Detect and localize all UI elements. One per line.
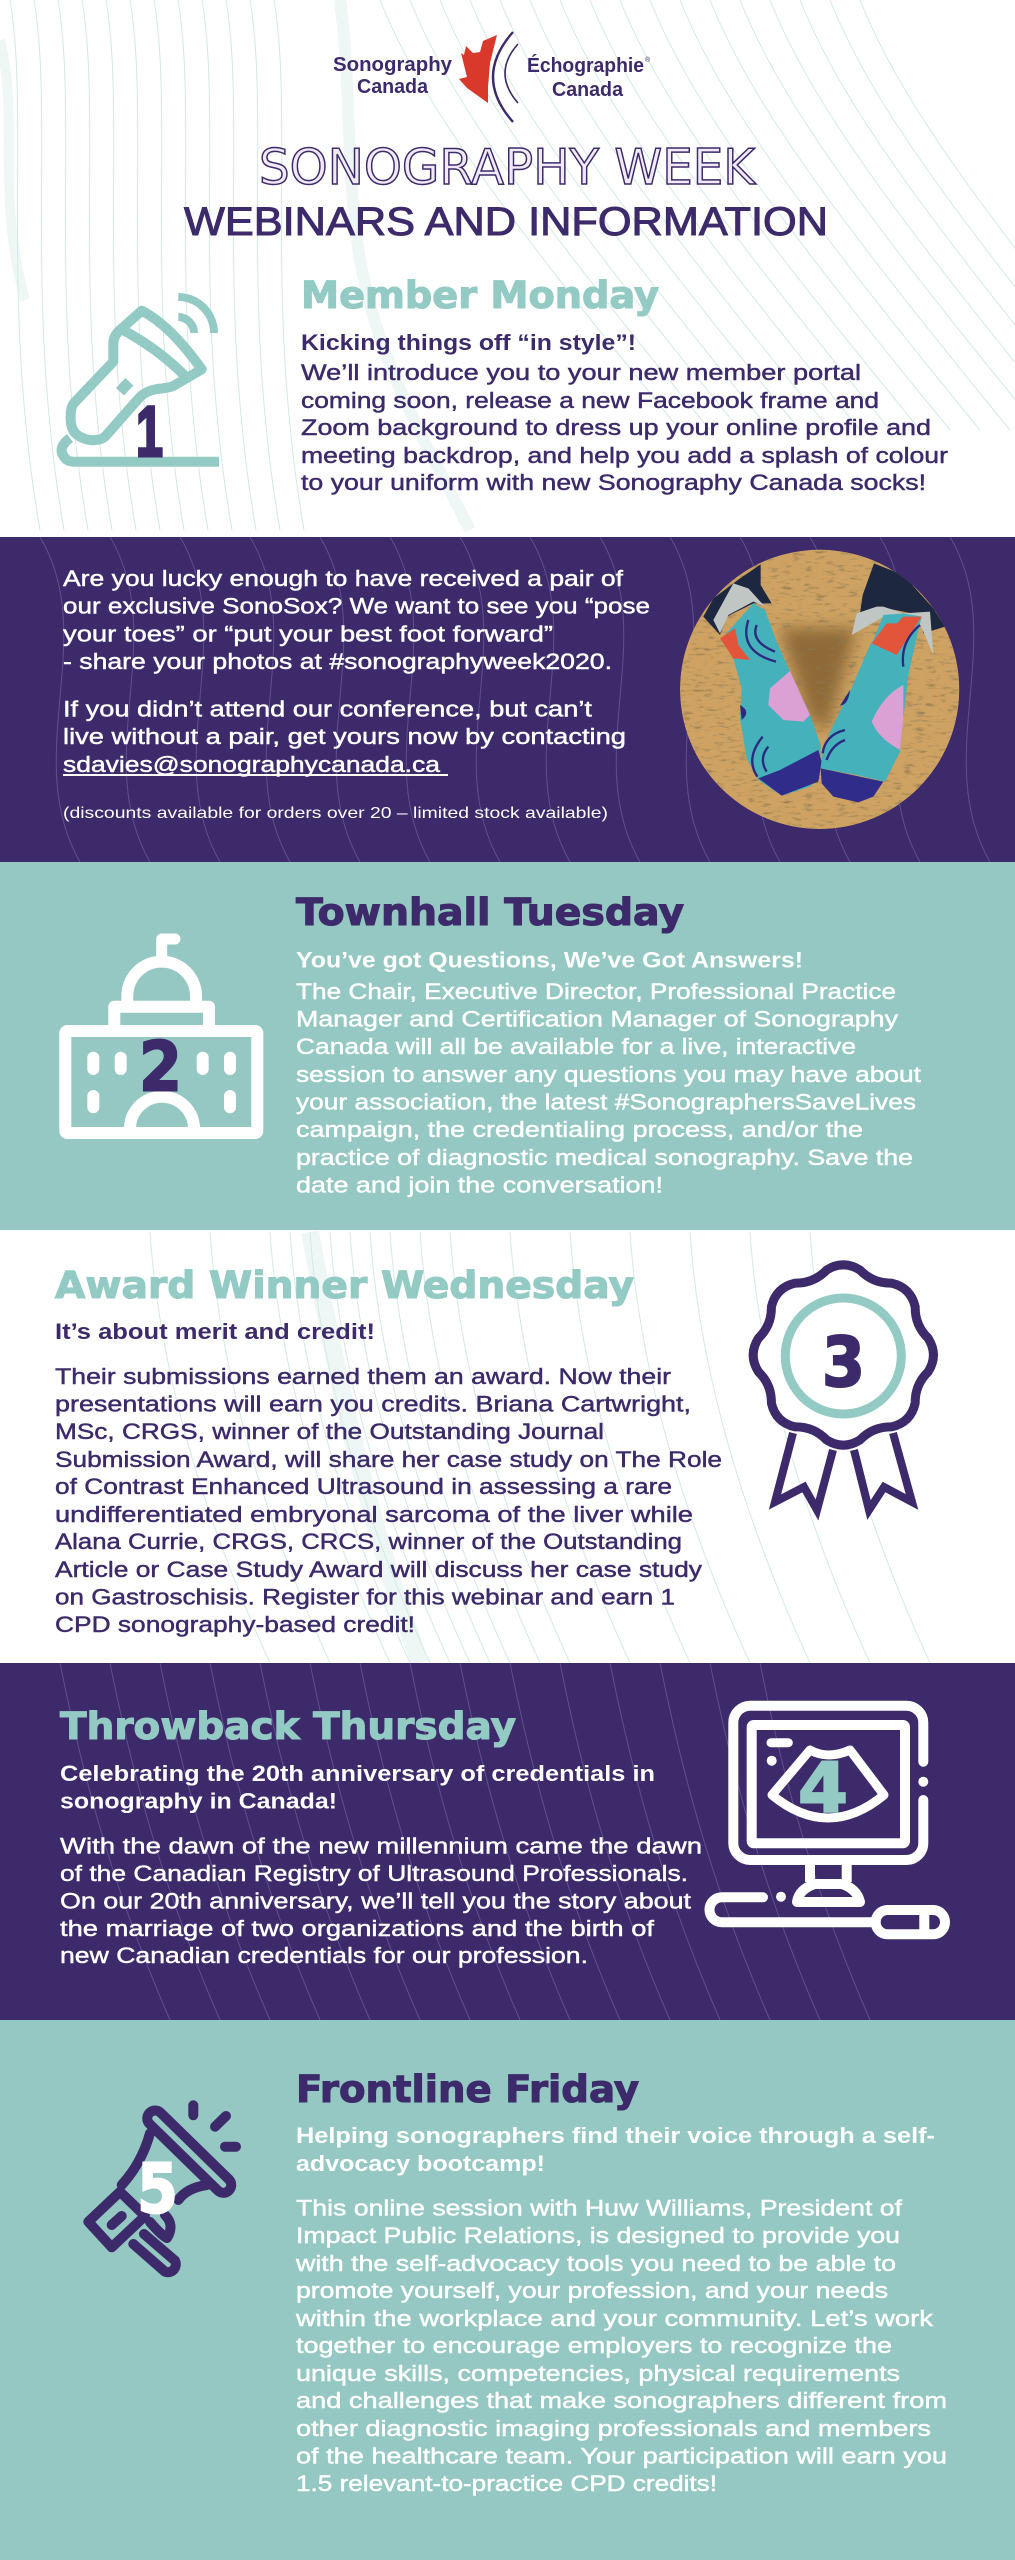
- subheading: Kicking things off “in style”!: [301, 330, 636, 355]
- icon: award rosette with number 3: [753, 1265, 933, 1510]
- body text: promote yourself, your profession, and your needs: [296, 2278, 888, 2303]
- body text: of Contrast Enhanced Ultrasound in assessing a rare: [55, 1474, 672, 1499]
- logo: Sonography Canada: Sonography: [333, 54, 453, 76]
- body text: presentations will earn you credits. Briana Cartwright,: [55, 1392, 691, 1416]
- icon: megaphone with number 5: [88, 2105, 236, 2272]
- body text: on Gastroschisis. Register for this webinar and earn 1: [55, 1584, 675, 1610]
- body text: and challenges that make sonographers different from: [296, 2388, 947, 2413]
- subheading: [60, 1761, 655, 1814]
- body text: We’ll introduce you to your new member portal: [301, 360, 861, 385]
- body text: the marriage of two organizations and the birth of: [60, 1916, 655, 1941]
- body text: Their submissions earned them an award. Now their: [55, 1364, 672, 1389]
- body text: unique skills, competencies, physical requirements: [296, 2361, 900, 2386]
- body text: Zoom background to dress up your online profile and: [301, 415, 931, 440]
- body text: new Canadian credentials for our profession.: [60, 1943, 588, 1968]
- panel: Member Monday: [62, 274, 949, 495]
- body text: socks: Are you lucky enough to have received a pair of: [63, 566, 624, 591]
- logo: Sonography Canada: Échographie: [527, 54, 644, 77]
- body text: undifferentiated embryonal sarcoma of the liver while: [55, 1502, 693, 1527]
- body text: socks: - share your photos at #sonographyweek2020.: [63, 649, 612, 674]
- body text: The Chair, Executive Director, Professional Practice: [296, 979, 896, 1004]
- body text: With the dawn of the new millennium came the dawn: [60, 1834, 702, 1858]
- body text: session to answer any questions you may have about: [296, 1062, 922, 1087]
- subheading: advocacy bootcamp!: [296, 2151, 545, 2176]
- subheading: Celebrating the 20th anniversary of credentials in: [60, 1761, 655, 1786]
- icon: megaphone with number 5: 5: [137, 2150, 178, 2230]
- body text: Alana Currie, CRGS, CRCS, winner of the Outstanding: [55, 1529, 682, 1554]
- body text: [301, 360, 949, 495]
- heading: Award Winner Wednesday: [55, 1264, 634, 1307]
- subheading: It’s about merit and credit!: [55, 1319, 375, 1344]
- body text: Article or Case Study Award will discuss her case study: [55, 1557, 703, 1582]
- title: Sonography Week: SONOGRAPHY WEEK: [259, 139, 757, 196]
- footnote: (discounts available for orders over 20 – limited stock available): [63, 805, 608, 822]
- panel: SonoSox: [0, 537, 1015, 862]
- body text: Canada will all be available for a live, interactive: [296, 1034, 856, 1059]
- heading: Member Monday: [301, 274, 659, 317]
- body text: [295, 2196, 947, 2496]
- body text: socks: [63, 566, 650, 777]
- logo: Sonography Canada: Canada: [552, 79, 624, 101]
- logo: Sonography Canada: [333, 32, 651, 122]
- subheading: [296, 2123, 935, 2176]
- body text: Impact Public Relations, is designed to provide you: [296, 2223, 900, 2248]
- panel: Throwback Thursday: [0, 1663, 1015, 2020]
- body text: meeting backdrop, and help you add a splash of colour: [301, 443, 949, 468]
- icon: ultrasound monitor with number 4: [710, 1706, 945, 1934]
- body text: MSc, CRGS, winner of the Outstanding Journal: [55, 1419, 604, 1444]
- logo: Sonography Canada: ®: [645, 56, 651, 64]
- subheading: sonography in Canada!: [60, 1788, 337, 1814]
- photo: socks on cork floor: [680, 550, 960, 830]
- body text: within the workplace and your community. Let’s work: [295, 2306, 934, 2331]
- icon: parliament building with number 2: 2: [139, 1028, 182, 1108]
- body text: to your uniform with new Sonography Canada socks!: [301, 470, 926, 495]
- panel: Frontline Friday: [0, 2020, 1015, 2560]
- body text: socks: sdavies@sonographycanada.ca: [63, 752, 441, 777]
- panel: Townhall Tuesday: [0, 862, 1015, 1230]
- icon: ultrasound probe with number 1: 1: [136, 393, 163, 472]
- body text: [296, 979, 922, 1198]
- body text: your association, the latest #SonographersSaveLives: [296, 1090, 916, 1114]
- body text: Manager and Certification Manager of Sonography: [296, 1006, 899, 1032]
- body text: other diagnostic imaging professionals and members: [296, 2416, 931, 2441]
- body text: Submission Award, will share her case study on The Role: [55, 1447, 722, 1472]
- body text: On our 20th anniversary, we’ll tell you the story about: [60, 1888, 692, 1914]
- icon: award rosette with number 3: 3: [822, 1323, 865, 1403]
- icon: parliament building with number 2: [65, 939, 257, 1133]
- body text: 1.5 relevant-to-practice CPD credits!: [296, 2471, 717, 2496]
- body text: campaign, the credentialing process, and/or the: [296, 1117, 863, 1142]
- body text: practice of diagnostic medical sonography. Save the: [296, 1145, 913, 1170]
- body text: CPD sonography-based credit!: [55, 1612, 415, 1637]
- body text: of the Canadian Registry of Ultrasound Professionals.: [60, 1861, 688, 1886]
- body text: with the self-advocacy tools you need to be able to: [295, 2251, 896, 2276]
- body text: [60, 1834, 702, 1968]
- icon: ultrasound monitor with number 4: 4: [798, 1749, 848, 1829]
- body text: of the healthcare team. Your participation will earn you: [296, 2444, 947, 2468]
- panel: Award Winner Wednesday: [55, 1264, 933, 1637]
- subheading: Helping sonographers find their voice through a self-: [296, 2123, 935, 2148]
- body text: socks: live without a pair, get yours now by contacting: [63, 724, 626, 749]
- body text: date and join the conversation!: [296, 1172, 663, 1198]
- body text: together to encourage employers to recognize the: [296, 2333, 892, 2358]
- body text: socks: If you didn’t attend our conference, but can’t: [63, 696, 593, 722]
- body text: [55, 1364, 722, 1637]
- logo: Sonography Canada: Canada: [357, 76, 429, 98]
- body text: socks: your toes” or “put your best foot forward”: [63, 622, 553, 646]
- body text: socks: our exclusive SonoSox? We want to see you “pose: [63, 594, 650, 618]
- icon: ultrasound probe with number 1: [62, 297, 219, 472]
- subtitle: Webinars and Information: WEBINARS AND INFORMATION: [184, 200, 828, 244]
- body text: coming soon, release a new Facebook frame and: [301, 388, 879, 413]
- heading: Throwback Thursday: [60, 1705, 516, 1748]
- heading: Frontline Friday: [296, 2068, 639, 2111]
- subheading: You’ve got Questions, We’ve Got Answers!: [296, 948, 803, 972]
- heading: Townhall Tuesday: [296, 891, 684, 934]
- body text: This online session with Huw Williams, President of: [296, 2196, 903, 2220]
